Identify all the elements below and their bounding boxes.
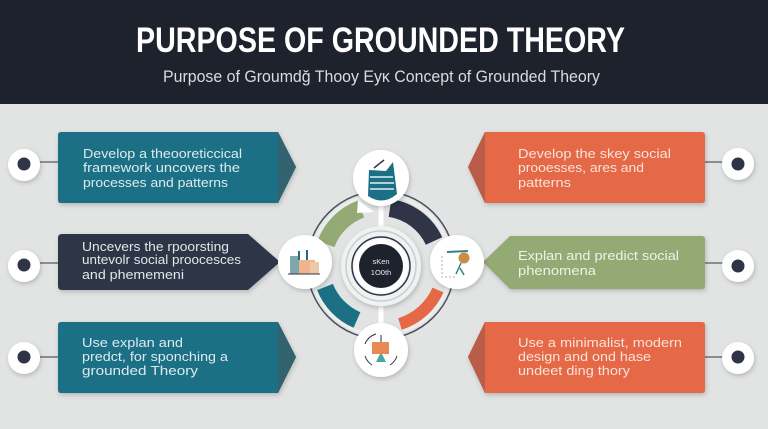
panel: left bottom, grounded theory [8, 322, 296, 393]
panel text [518, 248, 679, 278]
panel text: untevolr social proocesces [82, 252, 242, 267]
panel text: and phememeni [82, 267, 184, 282]
header band [0, 0, 768, 104]
panel: left top, theoretical framework [8, 132, 296, 203]
panel text: processes and patterns [83, 175, 229, 190]
panel text: Explan and predict social [518, 248, 679, 263]
panel text: design and ond hase [518, 349, 651, 364]
icon: right node, figure with pointer [430, 235, 484, 289]
panel text [518, 335, 682, 378]
connector and dot [705, 342, 754, 374]
connector and dot [705, 148, 754, 180]
icon: top node, stacked document [353, 150, 409, 213]
panel text [82, 335, 229, 378]
panel text: Develop a theooreticcical [83, 146, 242, 161]
icon: left node, buildings [278, 235, 332, 289]
panel: left middle, social processes [8, 234, 280, 290]
outer ring [307, 191, 455, 339]
panel: right bottom, minimalist design [468, 322, 754, 393]
panel text: phenomena [518, 263, 597, 278]
arc: orange [400, 290, 438, 324]
icon: bottom node, presentation board [354, 323, 408, 377]
panel text: framework uncovers the [83, 160, 240, 175]
panel text: Use explan and [82, 335, 183, 350]
panel: right middle, explain and predict [483, 236, 754, 289]
arc: teal [325, 287, 357, 320]
arc: navy [390, 208, 434, 241]
panel text: undeet ding thory [518, 363, 631, 378]
connector and dot [8, 342, 58, 374]
connector and dot [705, 250, 754, 282]
inner hub [341, 226, 421, 306]
panel text: grounded Theory [82, 363, 199, 378]
panel text: prooesses, ares and [518, 160, 644, 175]
panel text: Develop the skey social [518, 146, 671, 161]
panel text [518, 146, 671, 190]
panel text [82, 239, 242, 282]
panel text: predct, for sponching a [82, 349, 229, 364]
vertical connectors [378, 200, 384, 328]
panel: right top, key social processes [468, 132, 754, 203]
connector and dot [8, 250, 58, 282]
hub label: 1O0th [371, 268, 391, 277]
panel text [83, 146, 242, 190]
hub label: sKen [372, 257, 390, 266]
title: PURPOSE OF GROUNDED THEORY [136, 21, 625, 60]
panel text: Uncevers the rpoorsting [82, 239, 229, 254]
connector and dot [8, 149, 58, 181]
panel text: patterns [518, 175, 572, 190]
panel text: Use a minimalist, modern [518, 335, 682, 350]
arc: green [326, 209, 361, 244]
central cycle diagram [278, 150, 484, 377]
subtitle: Purpose of Groumdğ Thooy Eyĸ Concept of Grounded Theory [163, 67, 600, 86]
hub label [371, 257, 391, 277]
